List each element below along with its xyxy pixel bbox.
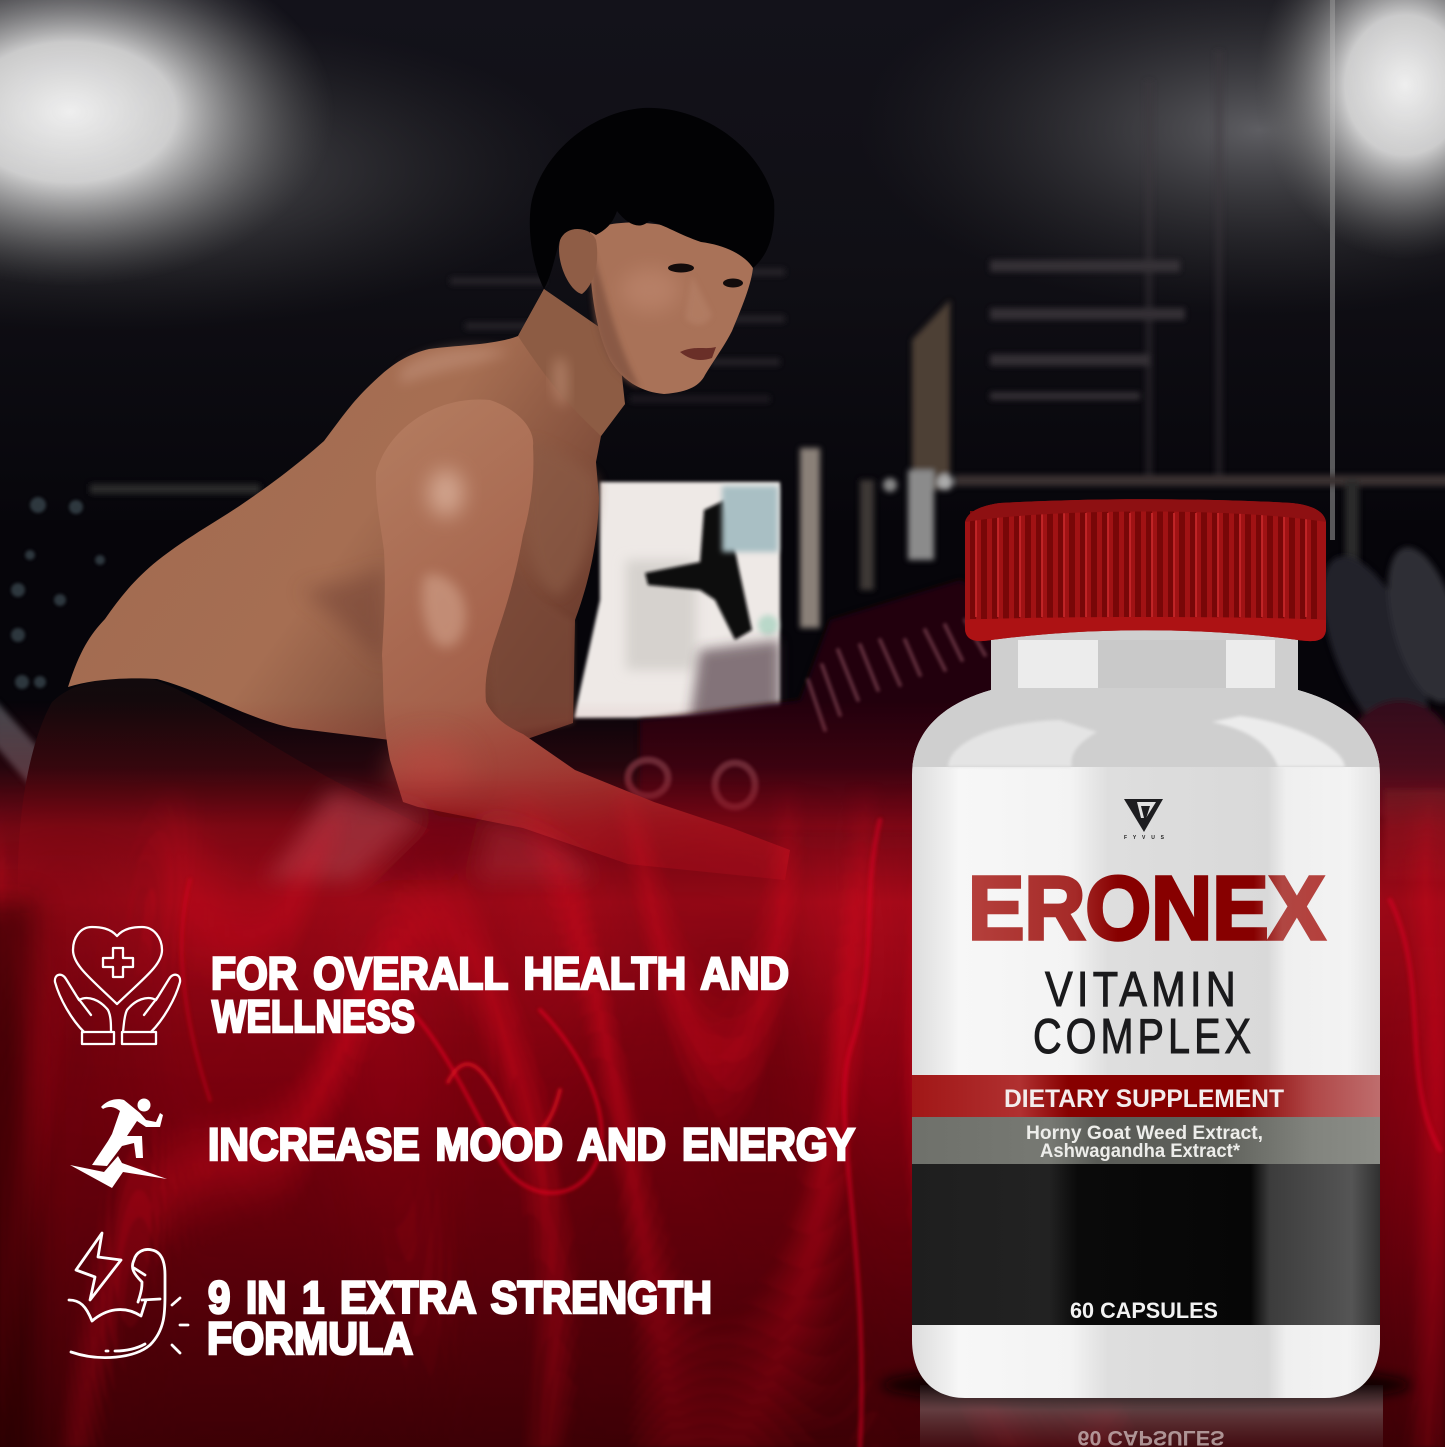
back crease shadow xyxy=(300,565,385,665)
dietary supplement band text: DIETARY SUPPLEMENT xyxy=(1004,1085,1284,1113)
arm xyxy=(376,399,790,880)
benefit text 3 line 2: FORMULA xyxy=(207,1313,413,1364)
benefit 2: mood and energy xyxy=(70,1098,855,1188)
ingredients text line 2: Ashwagandha Extract* xyxy=(1040,1140,1240,1162)
bottle cap xyxy=(965,499,1326,641)
brand name: ERONEX xyxy=(968,859,1325,959)
benefit text 1: FOR OVERALL HEALTH AND xyxy=(211,948,789,999)
arm shine 2 xyxy=(422,574,466,647)
product bottle xyxy=(905,499,1385,1447)
chest shading xyxy=(524,440,597,595)
mouth xyxy=(680,347,716,360)
torso xyxy=(68,289,625,745)
capsule count: 60 CAPSULES xyxy=(1070,1298,1218,1323)
swirl lines xyxy=(182,820,1440,1447)
ingredients text line 1: Horny Goat Weed Extract, xyxy=(1026,1122,1263,1144)
brand logo xyxy=(1124,799,1165,841)
hair xyxy=(530,108,774,289)
abdomen shadow xyxy=(491,560,573,735)
eyes xyxy=(668,264,743,288)
benefit text 1 line 2: WELLNESS xyxy=(212,991,415,1042)
cheek shadow xyxy=(591,250,640,388)
shorts xyxy=(18,678,430,950)
left edge shading xyxy=(0,900,35,1447)
product line 1: VITAMIN xyxy=(1045,963,1240,1017)
bench stripes on lower body xyxy=(265,790,595,880)
dumbbell racks xyxy=(628,539,1445,880)
icon: runner xyxy=(70,1098,167,1188)
icon: heart in hands xyxy=(55,927,180,1044)
ear xyxy=(559,229,597,294)
bottle body xyxy=(905,630,1385,1405)
cheek highlight xyxy=(620,268,680,312)
brand logo: FYVUS xyxy=(1124,835,1165,841)
product line 2: COMPLEX xyxy=(1033,1010,1255,1064)
benefit 1: health and wellness xyxy=(55,927,789,1044)
arm shine 1 xyxy=(428,469,464,517)
shadow under bottle xyxy=(881,1363,1411,1407)
top right light glow xyxy=(1255,0,1445,260)
top left light glow xyxy=(0,0,335,287)
neck xyxy=(518,289,625,436)
red smoke fade over lower image xyxy=(0,700,1445,1447)
icon: flexed bicep with bolt xyxy=(69,1233,188,1358)
marble texture xyxy=(0,780,1445,1447)
bright gym window xyxy=(574,482,780,720)
person: athlete xyxy=(18,108,790,950)
nose shadow xyxy=(685,275,712,325)
benefit text 3: 9 IN 1 EXTRA STRENGTH xyxy=(208,1272,712,1323)
arm elbow tint xyxy=(390,740,470,800)
benefit text 2: INCREASE MOOD AND ENERGY xyxy=(208,1119,855,1170)
benefit 3: extra strength xyxy=(69,1233,712,1364)
shoulder highlight xyxy=(400,348,510,385)
neck shine xyxy=(553,357,568,406)
face xyxy=(590,223,753,394)
bottle reflection xyxy=(920,1385,1383,1447)
